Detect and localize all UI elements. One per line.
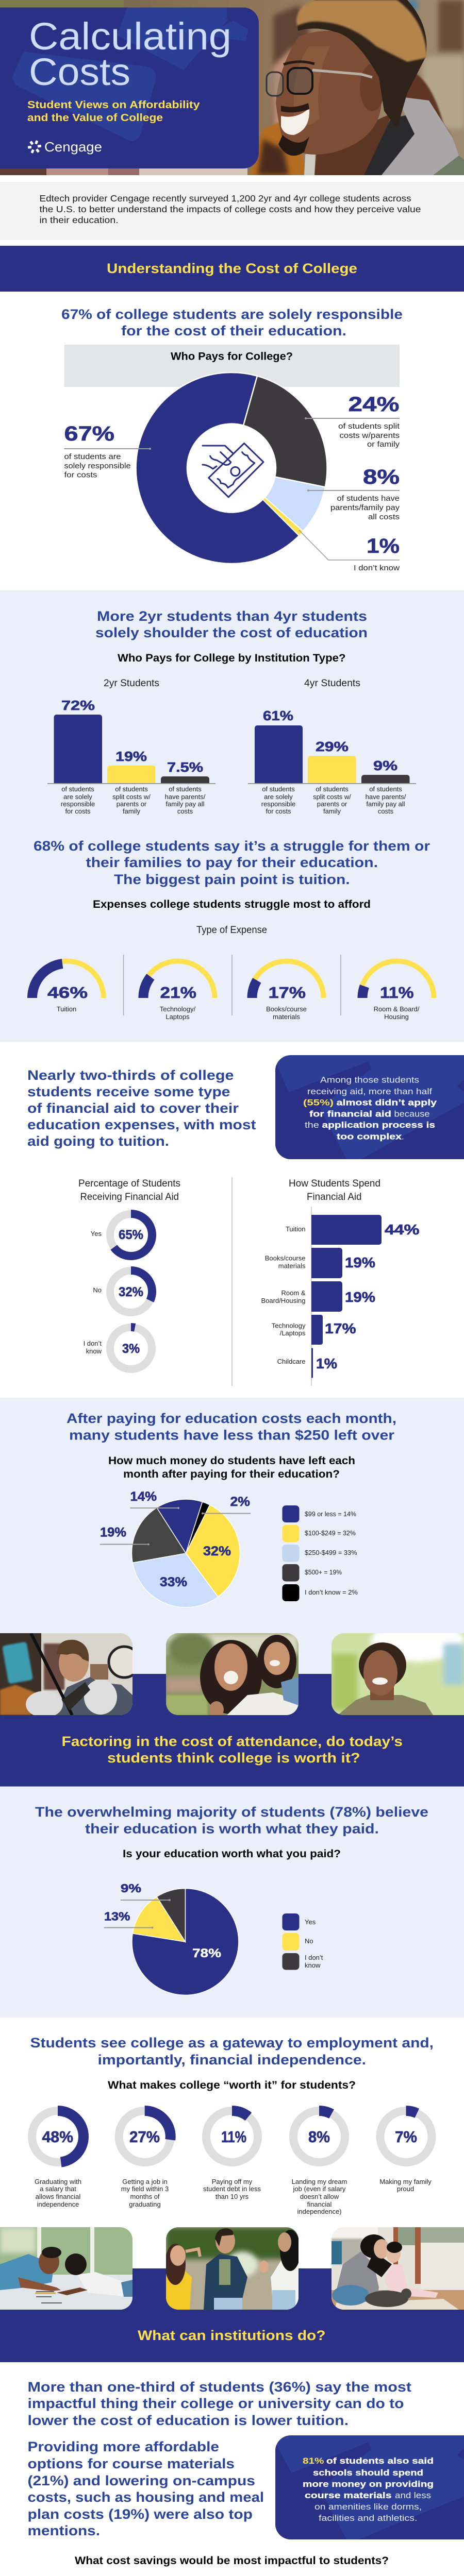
gauge: technology 21%: Technology/ <box>160 1005 196 1013</box>
section band: is college worth it: students think college is worth it? <box>107 1750 360 1766</box>
donut: 7% family proud: 7% <box>395 2128 417 2146</box>
heading: impactful thing their college or university can do to <box>28 2396 404 2411</box>
photo: smiling woman outdoors <box>332 1633 464 1715</box>
intro text block: the U.S. to better understand the impacts of college costs and how they perceive value <box>39 204 421 214</box>
heading <box>95 608 368 640</box>
callout: 67%: 67% <box>64 422 114 445</box>
text block: affordable options: plan costs (19%) were also top <box>28 2506 253 2522</box>
chart title: Who Pays for College by Institution Type? <box>118 652 345 664</box>
icon: hand holding money <box>203 443 263 497</box>
chart title box <box>64 345 400 387</box>
callout: 1%: I don’t know <box>354 564 400 572</box>
legend: $500+ = 19% <box>305 1568 342 1576</box>
heading: education expenses, with most <box>27 1117 256 1132</box>
gauge: tuition 46% <box>27 959 104 1013</box>
callout: course materials: course materials <box>305 2490 392 2500</box>
bar chart: 2yr students: family <box>123 807 140 815</box>
subtitle: Student Views on Affordability <box>27 99 201 111</box>
heading: Nearly two-thirds of college <box>27 1067 234 1083</box>
heading <box>28 2379 411 2428</box>
callout: 24% <box>305 393 400 449</box>
donut: 48% financial independence <box>32 2111 84 2208</box>
bar chart: 2yr students <box>47 678 216 815</box>
hero banner <box>0 0 464 175</box>
panel: money left each month <box>0 1398 464 1676</box>
gauge: books 17%: Books/course <box>266 1005 307 1013</box>
callout: 67%: for costs <box>64 471 97 479</box>
bar chart: 4yr students: have parents/ <box>366 793 406 801</box>
bar chart: 4yr students: costs <box>378 807 394 815</box>
pie chart: money left: 14% <box>130 1489 157 1504</box>
text block: affordable options: (21%) and lowering on-campus <box>28 2473 255 2488</box>
gauge: room and board 11%: Room & Board/ <box>374 1005 420 1013</box>
callout: 24%: or family <box>367 440 400 449</box>
callout: 67%: solely responsible <box>64 462 131 470</box>
gauge: room and board 11%: 11% <box>380 984 413 1002</box>
text block: affordable options: mentions. <box>28 2523 100 2538</box>
bar chart: 2yr students: of students <box>115 785 148 793</box>
panel: what makes college worth it <box>30 2035 434 2215</box>
bar chart: 4yr students: family pay all <box>366 800 405 808</box>
text block: affordable options <box>28 2439 264 2538</box>
donut: 11% paying off debt: student debt in less <box>203 2185 261 2193</box>
donut: yes 65%: Yes <box>91 1230 102 1238</box>
donut: 27% job in my field: my field within 3 <box>121 2185 169 2193</box>
section band: Understanding the Cost of College <box>0 246 464 292</box>
legend: know <box>305 1961 321 1969</box>
bar chart: 4yr students: of students <box>262 785 295 793</box>
bar chart: how students spend aid: Room & <box>281 1289 306 1297</box>
callout: 8%: parents/family pay <box>330 504 400 512</box>
section band: is college worth it <box>0 1674 464 1787</box>
donut: 11% paying off debt <box>203 2111 261 2200</box>
callout: application process: Among those students <box>320 1075 419 1085</box>
title: Calculating <box>29 15 231 58</box>
title <box>29 15 231 93</box>
bar chart: how students spend aid: Tuition <box>286 1225 305 1233</box>
chart: percentage of students receiving aid: Percentage of Students <box>78 1178 180 1189</box>
donut: 27% job in my field: months of <box>130 2193 160 2200</box>
callout: application process: almost didn’t apply <box>337 1097 437 1108</box>
bar chart: how students spend aid: Board/Housing <box>261 1297 305 1304</box>
legend: I don’t <box>305 1954 323 1961</box>
heading <box>27 1067 256 1149</box>
gauge: technology 21% <box>138 961 214 1021</box>
section band: what can institutions do <box>0 2268 464 2362</box>
callout: application process: (55%) <box>303 1097 334 1108</box>
heading: many students have less than $250 left over <box>69 1427 395 1443</box>
subtitle: and the Value of College <box>27 112 163 124</box>
heading <box>67 1411 396 1443</box>
subtitle <box>27 99 201 124</box>
bar chart: 4yr students: 61% <box>263 708 293 723</box>
pie chart: worth it <box>104 1882 239 1995</box>
donut: yes 65% <box>91 1214 152 1256</box>
callout: 67% <box>64 422 151 479</box>
callout: application process: application process is <box>322 1120 435 1130</box>
bar chart: 4yr students: of students <box>369 785 402 793</box>
heading: of financial aid to cover their <box>27 1100 239 1116</box>
heading: struggle to pay: 68% of college students say it’s a struggle for them or <box>34 838 430 854</box>
bar chart: 2yr students: for costs <box>65 807 91 815</box>
callout: 1% <box>299 530 400 572</box>
gauge: books 17% <box>247 961 324 1021</box>
donut: 48% financial independence: a salary that <box>40 2185 76 2193</box>
donut: 8% dream job: independence) <box>297 2208 342 2215</box>
callout: 1%: 1% <box>367 535 400 557</box>
heading: their education is worth what they paid. <box>85 1821 379 1836</box>
chart: percentage of students receiving aid: Receiving Financial Aid <box>80 1192 179 1202</box>
chart title: Is your education worth what you paid? <box>123 1848 341 1860</box>
bar chart: how students spend aid: Technology <box>272 1322 306 1329</box>
donut: 7% family proud: proud <box>397 2185 414 2193</box>
callout: application process <box>275 1055 464 1159</box>
heading: 67% of college students are solely responsible <box>61 307 403 322</box>
photo: three students talking <box>165 2227 301 2310</box>
bar chart: how students spend aid: Financial Aid <box>307 1192 362 1202</box>
logo: Cengage: Cengage <box>44 139 102 155</box>
heading: The overwhelming majority of students (78%) believe <box>35 1804 428 1820</box>
bar chart: 2yr students: 2yr Students <box>104 678 159 689</box>
panel: financial aid <box>27 1055 464 1386</box>
callout: 67%: of students are <box>64 453 121 461</box>
donut: don't know 3% <box>84 1327 152 1369</box>
callout: 8%: 8% <box>363 466 400 488</box>
donut: 48% financial independence: Graduating with <box>35 2178 81 2185</box>
heading: importantly, financial independence. <box>98 2052 366 2067</box>
bar chart: 2yr students: costs <box>177 807 193 815</box>
bar chart: 4yr students: parents or <box>317 800 347 808</box>
bar chart: 4yr students: are solely <box>264 793 293 801</box>
legend: No <box>305 1937 313 1945</box>
donut: don't know 3%: 3% <box>122 1342 140 1356</box>
bar chart: 2yr students: of students <box>61 785 94 793</box>
intro text block: in their education. <box>39 215 119 225</box>
bar chart: how students spend aid: 1% <box>316 1355 337 1371</box>
donut: 8% dream job: 8% <box>308 2128 330 2146</box>
intro text block <box>0 182 464 240</box>
panel: what institutions can do <box>28 2379 464 2576</box>
panel: who pays for college <box>61 307 403 572</box>
heading: More 2yr students than 4yr students <box>97 608 367 624</box>
donut: don't know 3%: I don’t <box>84 1340 102 1347</box>
chart title: What makes college “worth it” for students? <box>108 2079 356 2091</box>
donut: no 32% <box>93 1270 152 1313</box>
donut: 11% paying off debt: than 10 yrs <box>216 2193 249 2200</box>
legend: I don’t know = 2% <box>305 1588 358 1596</box>
gauge: books 17%: 17% <box>268 984 306 1002</box>
heading: More than one-third of students (36%) say the most <box>28 2379 411 2395</box>
callout: application process: because <box>394 1109 430 1119</box>
heading: students receive some type <box>27 1084 230 1099</box>
callout: course materials: of students also said <box>326 2456 434 2466</box>
callout: application process: . <box>402 1131 404 1142</box>
gauge: room and board 11%: Housing <box>384 1013 409 1021</box>
gauge: books 17%: materials <box>273 1013 300 1021</box>
photo: father and child drawing on the floor <box>0 2227 132 2310</box>
callout: 8%: all costs <box>368 513 400 521</box>
heading: struggle to pay: The biggest pain point is tuition. <box>114 872 350 887</box>
pie chart: money left: 19% <box>100 1525 126 1539</box>
donut: 8% dream job: doesn’t allow <box>300 2193 339 2200</box>
donut: yes 65%: 65% <box>119 1228 143 1242</box>
title: Costs <box>29 50 130 93</box>
section band: what can institutions do: What can institutions do? <box>138 2328 326 2343</box>
bar chart: 4yr students: split costs w/ <box>313 793 351 801</box>
pie chart: worth it: 13% <box>104 1909 130 1923</box>
pie chart: money left: 33% <box>160 1575 187 1589</box>
pie chart: money left: 32% <box>203 1544 231 1558</box>
bar chart: 4yr students: family <box>323 807 341 815</box>
heading: struggle to pay <box>34 838 430 887</box>
callout: course materials: on amenities like dorms, <box>314 2502 422 2512</box>
bar chart: 2yr students: 72% <box>61 698 95 713</box>
hero photo: smiling student with glasses <box>0 0 464 175</box>
pie chart: worth it: 9% <box>121 1882 141 1895</box>
callout: application process: too complex <box>337 1131 402 1142</box>
donut: 11% paying off debt: 11% <box>221 2128 246 2146</box>
bar chart: how students spend aid: Childcare <box>277 1358 305 1365</box>
chart title: month after paying for their education? <box>123 1468 340 1480</box>
bar chart: how students spend aid: How Students Spend <box>289 1178 380 1189</box>
legend: $99 or less = 14% <box>305 1510 356 1518</box>
callout: application process: for financial aid <box>309 1109 391 1119</box>
callout: course materials: schools should spend <box>313 2468 423 2478</box>
heading: struggle to pay: their families to pay for their education. <box>86 855 378 870</box>
bar chart: 4yr students: responsible <box>261 800 295 808</box>
callout: 8%: of students have <box>337 495 400 503</box>
gauge: technology 21%: Laptops <box>165 1013 190 1021</box>
donut: 8% dream job <box>292 2111 347 2215</box>
legend: Yes <box>305 1918 316 1926</box>
callout: 24%: of students split <box>338 422 400 431</box>
intro text block: Edtech provider Cengage recently surveyed 1,200 2yr and 4yr college students across <box>39 193 411 204</box>
gauge: tuition 46%: Tuition <box>57 1005 76 1013</box>
callout: 24%: 24% <box>349 393 399 416</box>
bar chart: how students spend aid <box>261 1178 420 1386</box>
heading: After paying for education costs each month, <box>67 1411 396 1426</box>
heading: for the cost of their education. <box>121 323 346 338</box>
callout: application process: receiving aid, more than half <box>307 1087 432 1096</box>
bar chart: how students spend aid: Books/course <box>265 1254 305 1262</box>
heading <box>35 1804 428 1836</box>
panel: institution type and expenses <box>0 590 464 1042</box>
callout: course materials: more money on providing <box>303 2479 434 2489</box>
bar chart: 4yr students: 4yr Students <box>304 678 360 689</box>
text block: affordable options: Providing more affordable <box>28 2439 219 2454</box>
gauge: technology 21%: 21% <box>160 984 196 1002</box>
panel: worth what they paid <box>0 1787 464 2018</box>
subtitle: type of expense: Type of Expense <box>196 925 267 936</box>
bar chart: 2yr students: parents or <box>117 800 147 808</box>
callout: course materials: and less <box>395 2490 431 2500</box>
donut: 27% job in my field: Getting a job in <box>122 2178 168 2185</box>
donut: 27% job in my field: 27% <box>129 2128 160 2146</box>
legend: $100-$249 = 32% <box>305 1529 356 1537</box>
bar chart: 2yr students: 7.5% <box>167 759 203 775</box>
bar chart: 2yr students: of students <box>169 785 202 793</box>
legend <box>283 1913 323 1970</box>
callout: 8% <box>307 466 400 521</box>
pie chart: money left: 2% <box>230 1495 250 1509</box>
bar chart: how students spend aid: /Laptops <box>280 1329 306 1337</box>
chart title: Expenses college students struggle most to afford <box>93 899 371 910</box>
chart title: What cost savings would be most impactful to students? <box>75 2555 389 2567</box>
bar chart: 2yr students: split costs w/ <box>112 793 151 801</box>
chart: percentage of students receiving aid <box>78 1178 180 1369</box>
bar chart: how students spend aid: 17% <box>325 1320 356 1336</box>
bar chart: 2yr students: responsible <box>61 800 95 808</box>
bar chart: 4yr students <box>248 678 416 815</box>
donut: 27% job in my field: graduating <box>129 2200 161 2208</box>
photo: laughing mother and daughter <box>166 1632 299 1718</box>
donut: 8% dream job: job (even if salary <box>293 2185 346 2193</box>
callout: application process: the <box>305 1120 319 1130</box>
bar chart: 4yr students: for costs <box>266 807 291 815</box>
legend <box>283 1505 358 1601</box>
chart title: How much money do students have left each <box>108 1455 355 1467</box>
donut: 8% dream job: financial <box>307 2200 332 2208</box>
title panel <box>0 7 259 168</box>
photo: mother, daughter and cat <box>332 2227 464 2310</box>
chart title box: Who Pays for College? <box>171 350 293 363</box>
callout: course materials: facilities and athletics. <box>319 2513 418 2523</box>
callout: course materials: 81% <box>303 2456 324 2466</box>
heading: aid going to tuition. <box>27 1133 169 1149</box>
donut: 7% family proud <box>379 2111 432 2193</box>
donut: 27% job in my field <box>119 2111 171 2208</box>
heading: lower the cost of education is lower tuition. <box>28 2413 349 2428</box>
chart title <box>108 1455 355 1480</box>
section band: Understanding the Cost of College: Understanding the Cost of College <box>107 261 357 276</box>
callout: 24%: costs w/parents <box>339 432 400 440</box>
bar chart: how students spend aid: 19% <box>345 1255 375 1270</box>
donut: don't know 3%: know <box>86 1347 102 1355</box>
bar chart: 2yr students: 19% <box>115 749 147 764</box>
legend: $250-$499 = 33% <box>305 1549 357 1556</box>
bar chart: how students spend aid: materials <box>278 1262 306 1269</box>
pie chart: money left <box>100 1489 251 1607</box>
heading: Students see college as a gateway to employment and, <box>30 2035 434 2050</box>
heading <box>30 2035 434 2067</box>
callout: course materials <box>275 2435 464 2539</box>
donut chart: who pays <box>136 372 327 564</box>
bar chart: 4yr students: 29% <box>316 739 349 754</box>
heading <box>61 307 403 338</box>
donut: 48% financial independence: 48% <box>42 2128 73 2146</box>
text block: affordable options: options for course materials <box>28 2456 235 2471</box>
donut: 48% financial independence: allows financial <box>36 2193 80 2200</box>
donut: no 32%: 32% <box>119 1285 143 1299</box>
bar chart: 2yr students: are solely <box>63 793 92 801</box>
bar chart: how students spend aid: 19% <box>345 1289 375 1305</box>
bar chart: 4yr students: 9% <box>373 758 397 773</box>
donut: no 32%: No <box>93 1286 102 1294</box>
bar chart: 4yr students: of students <box>316 785 349 793</box>
gauge: tuition 46%: 46% <box>47 984 88 1002</box>
gauge: room and board 11% <box>358 961 434 1021</box>
donut: 11% paying off debt: Paying off my <box>212 2178 253 2185</box>
donut: 7% family proud: Making my family <box>379 2178 432 2185</box>
donut: 48% financial independence: independence <box>37 2200 79 2208</box>
bar chart: how students spend aid: 44% <box>385 1222 420 1238</box>
section band: is college worth it: Factoring in the cost of attendance, do today’s <box>62 1734 403 1749</box>
heading: solely shoulder the cost of education <box>95 625 368 640</box>
photo: man repairing a bicycle <box>0 1633 140 1718</box>
pie chart: worth it: 78% <box>192 1946 221 1960</box>
text block: affordable options: costs, such as housing and meal <box>28 2489 264 2505</box>
bar chart: 2yr students: family pay all <box>165 800 205 808</box>
bar chart: 2yr students: have parents/ <box>165 793 206 801</box>
donut: 8% dream job: Landing my dream <box>292 2178 347 2185</box>
